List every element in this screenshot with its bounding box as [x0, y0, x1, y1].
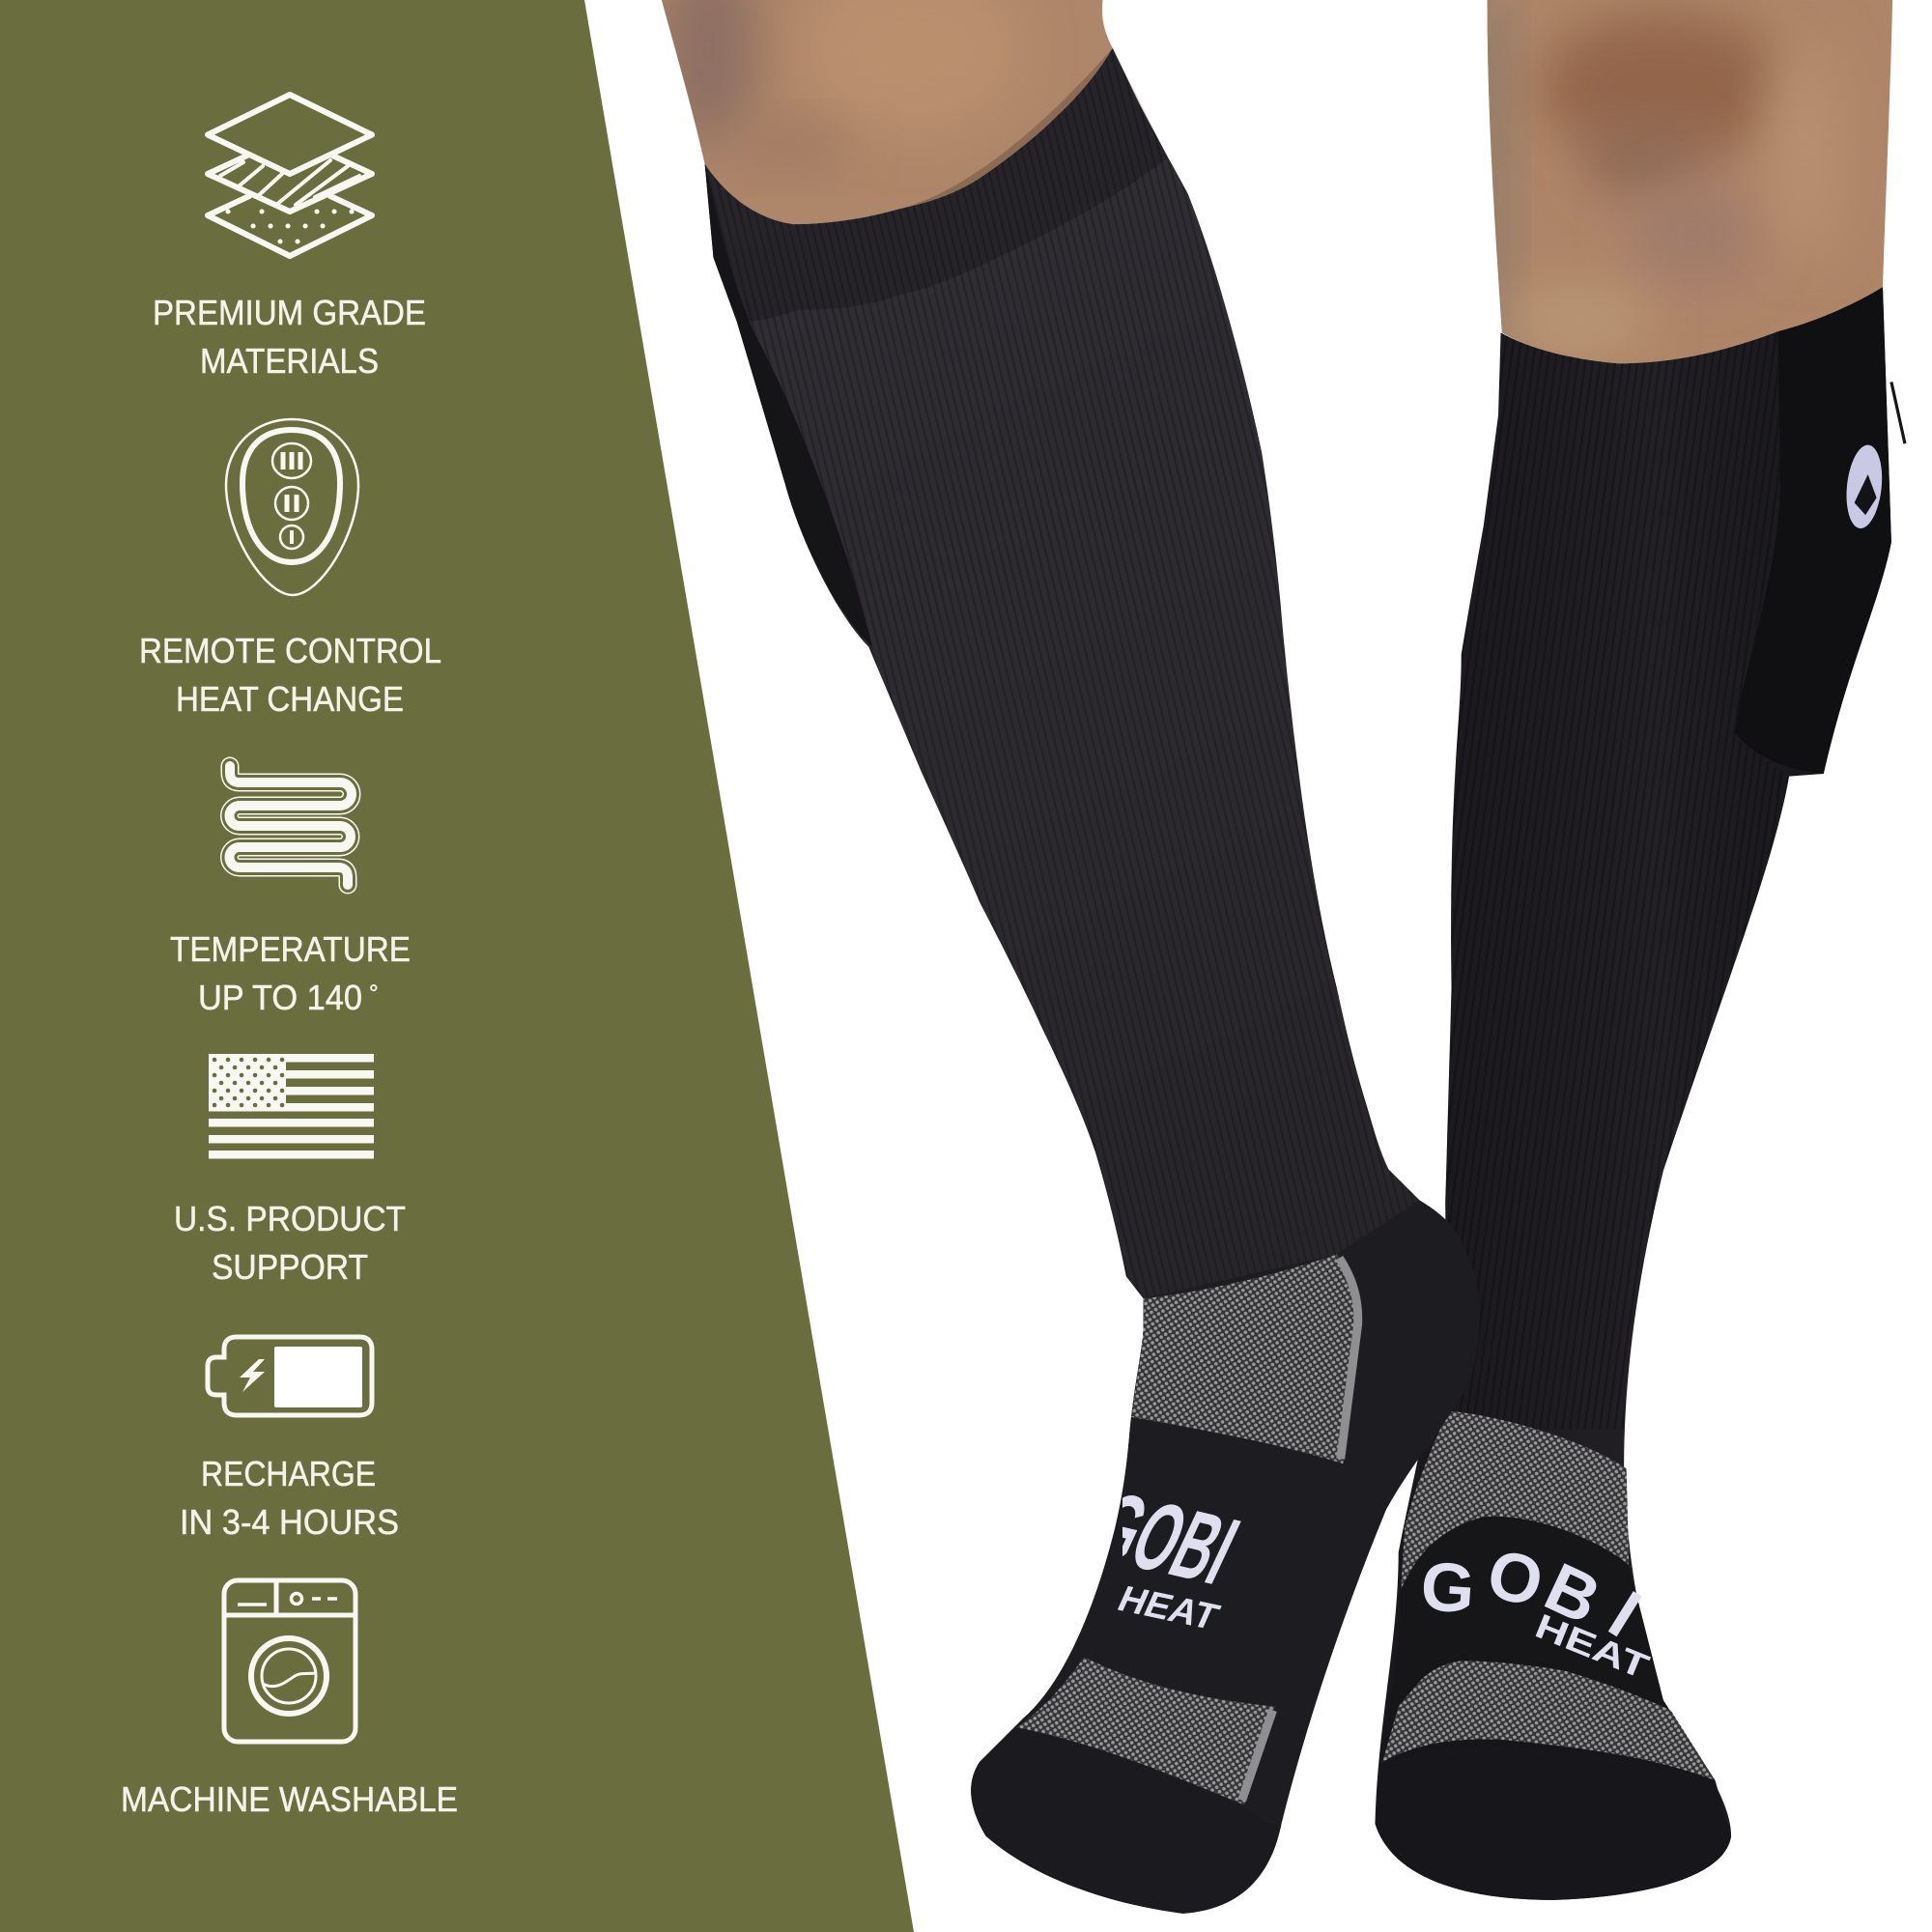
left toe — [971, 1727, 1282, 1914]
door glass — [262, 1649, 316, 1703]
right pocket — [1735, 287, 1891, 774]
left mesh trim — [1339, 1258, 1358, 1459]
knee lit side — [1754, 57, 1829, 214]
low bar — [290, 530, 294, 544]
logo badge — [1843, 443, 1886, 530]
right sock body — [1375, 287, 1891, 1900]
photo: legs wearing heated socks — [653, 0, 1905, 1914]
battery body — [208, 1337, 372, 1415]
left sock cuff — [705, 48, 1168, 322]
label: temperature up to 140 degrees — [170, 929, 411, 1017]
high button — [272, 443, 311, 478]
degree mark: ° — [369, 980, 379, 1007]
knee rosy centre — [1642, 191, 1746, 274]
medium button — [275, 487, 308, 520]
line 2: HEAT CHANGE — [176, 679, 404, 719]
left skin shadow — [773, 134, 815, 158]
right upper mesh — [1401, 1410, 1629, 1589]
line 1: REMOTE CONTROL — [139, 631, 441, 670]
remote outer shell — [226, 419, 358, 595]
icon: battery — [208, 1337, 372, 1415]
middle hatching — [220, 160, 359, 205]
line 1: TEMPERATURE — [170, 929, 411, 969]
line 1: PREMIUM GRADE — [153, 293, 426, 332]
GOBI wordmark: GOBI — [1418, 1534, 1653, 1652]
line 1: RECHARGE — [201, 1454, 376, 1493]
left lower mesh trim — [1242, 1710, 1273, 1801]
GOBI text: GOBI — [1076, 1472, 1254, 1605]
icon: remote control — [226, 419, 358, 595]
icon: layered materials — [208, 95, 372, 256]
knee edge shade — [1488, 0, 1526, 341]
icon: washing machine — [224, 1580, 355, 1742]
right sock — [1375, 287, 1905, 1900]
line 2: MATERIALS — [200, 341, 379, 381]
left upper mesh — [1131, 1254, 1361, 1463]
line 2: UP TO 140 — [198, 978, 362, 1017]
right foot black area — [1382, 1517, 1716, 1780]
left sock HEAT wordmark: HEAT — [1112, 1578, 1225, 1637]
coil outline — [230, 766, 352, 885]
line 1: U.S. PRODUCT — [174, 1199, 406, 1238]
battery charge — [274, 1347, 362, 1407]
high bars — [283, 452, 300, 469]
label: us product support — [174, 1199, 406, 1287]
left leg skin — [653, 0, 1122, 234]
medium bars — [287, 495, 297, 512]
left skin lit centre — [820, 0, 1003, 118]
left skin base — [653, 0, 1122, 234]
water wave — [263, 1673, 316, 1687]
coil core — [230, 766, 352, 885]
left skin rosy side — [659, 0, 757, 148]
left sock — [705, 48, 1480, 1914]
panel: green feature column — [0, 0, 914, 1932]
label: machine washable: MACHINE WASHABLE — [121, 1779, 458, 1819]
stripes — [209, 1054, 374, 1159]
bottom dots — [228, 212, 352, 242]
left foot dark area — [980, 1200, 1480, 1824]
coil gap — [230, 766, 352, 885]
control panel — [224, 1580, 355, 1615]
stars — [214, 1060, 282, 1105]
right sock ribbing — [1410, 331, 1789, 1430]
right lower mesh — [1382, 1661, 1716, 1780]
icon: american flag — [209, 1054, 374, 1159]
right sock logo text — [1418, 1534, 1654, 1687]
door — [251, 1638, 327, 1714]
low button — [280, 526, 303, 549]
label: premium grade materials — [153, 293, 426, 381]
bolt — [240, 1359, 265, 1392]
knee lit bottom — [1503, 283, 1651, 357]
left pocket edge — [705, 164, 872, 647]
left lower mesh — [1016, 1658, 1275, 1805]
panel controls — [238, 1599, 337, 1605]
machine body — [224, 1580, 355, 1742]
left sock body — [705, 48, 1480, 1914]
right toe — [1375, 1747, 1731, 1900]
knee dark upper — [1540, 13, 1786, 160]
line 2: SUPPORT — [212, 1247, 368, 1287]
right leg skin — [1466, 0, 1897, 370]
canton — [209, 1054, 286, 1109]
left sock ribbing — [705, 48, 1419, 1298]
right pocket logo — [1843, 443, 1886, 530]
zipper pull — [1891, 382, 1905, 443]
right skin base — [1479, 0, 1897, 370]
HEAT wordmark: HEAT — [1530, 1606, 1654, 1687]
bottom layer — [208, 196, 372, 256]
knee dark mid — [1580, 141, 1696, 203]
remote inner face — [242, 430, 340, 562]
label: remote control heat change — [139, 631, 441, 719]
line 2: IN 3-4 HOURS — [180, 1502, 399, 1542]
middle layer — [208, 155, 372, 212]
label: recharge in 3-4 hours — [180, 1454, 399, 1542]
knob — [292, 1594, 301, 1604]
top layer — [208, 95, 372, 174]
logo mark — [1855, 474, 1877, 515]
icon: heating coil — [230, 766, 352, 885]
